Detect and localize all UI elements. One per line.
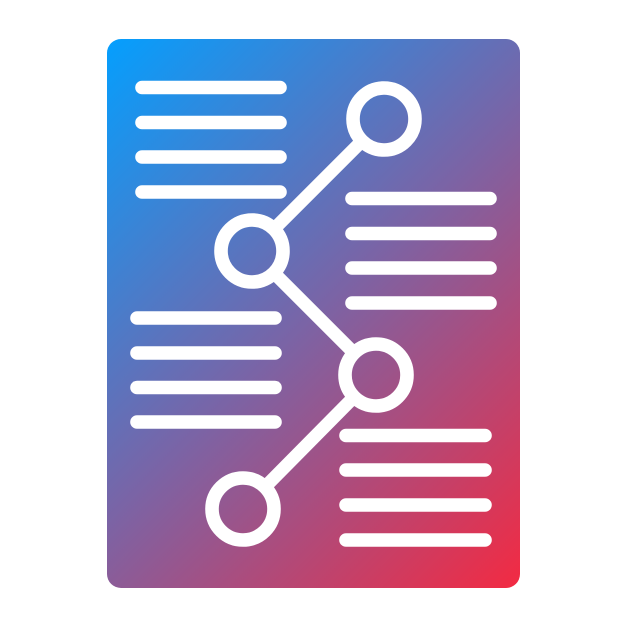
text lines: upper right block	[352, 198, 490, 303]
text lines: bottom right block	[346, 436, 485, 540]
panel: gradient document page	[107, 39, 520, 588]
text lines: top left block	[142, 88, 280, 192]
timeline connectors	[265, 141, 362, 487]
timeline nodes	[212, 88, 415, 540]
text lines: lower left block	[137, 318, 275, 422]
